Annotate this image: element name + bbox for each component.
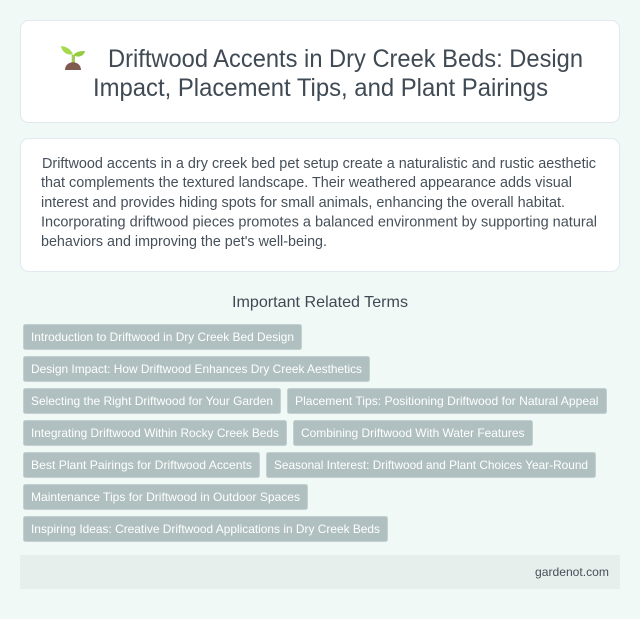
tag [24, 388, 280, 414]
description text [41, 156, 597, 250]
panel: description card [20, 138, 620, 272]
description text: Incorporating driftwood pieces promotes a balanced environment by supporting natural [41, 214, 597, 230]
tag: Design Impact: How Driftwood Enhances Dry Creek Aesthetics [31, 362, 362, 376]
tag: Placement Tips: Positioning Driftwood for Natural Appeal [295, 394, 598, 408]
tag [266, 452, 596, 478]
tag: Introduction to Driftwood in Dry Creek Bed Design [31, 330, 294, 344]
description text: that complements the textured landscape. Their weathered appearance adds visual [41, 175, 572, 191]
tag [294, 420, 532, 446]
tag [24, 452, 260, 478]
tag: Maintenance Tips for Driftwood in Outdoor Spaces [31, 490, 300, 504]
tag: Selecting the Right Driftwood for Your Garden [31, 394, 273, 408]
tag [24, 516, 388, 542]
title: Impact, Placement Tips, and Plant Pairings [93, 74, 548, 102]
tag: Best Plant Pairings for Driftwood Accents [31, 458, 252, 472]
description text: behaviors and improving the pet's well-being. [41, 234, 327, 250]
tag: Seasonal Interest: Driftwood and Plant Choices Year-Round [274, 458, 588, 472]
icon: sprout [61, 46, 85, 70]
tag [24, 484, 308, 510]
footer [20, 555, 620, 589]
section heading: Important Related Terms [232, 294, 408, 311]
related term tags [24, 324, 606, 542]
tag [24, 356, 370, 382]
title: Driftwood Accents in Dry Creek Beds: Design [108, 45, 583, 73]
description text: interest and provides hiding spots for small animals, enhancing the overall habitat. [41, 195, 565, 211]
panel: title card [20, 20, 620, 122]
description text: Driftwood accents in a dry creek bed pet setup create a naturalistic and rustic aesthetic [42, 156, 596, 172]
tag: Inspiring Ideas: Creative Driftwood Applications in Dry Creek Beds [31, 522, 380, 536]
footer: gardenot.com [535, 565, 609, 579]
tag: Combining Driftwood With Water Features [301, 426, 524, 440]
tag [24, 324, 302, 350]
tag [288, 388, 606, 414]
title [93, 45, 583, 102]
tag: Integrating Driftwood Within Rocky Creek Beds [31, 426, 279, 440]
tag [24, 420, 286, 446]
